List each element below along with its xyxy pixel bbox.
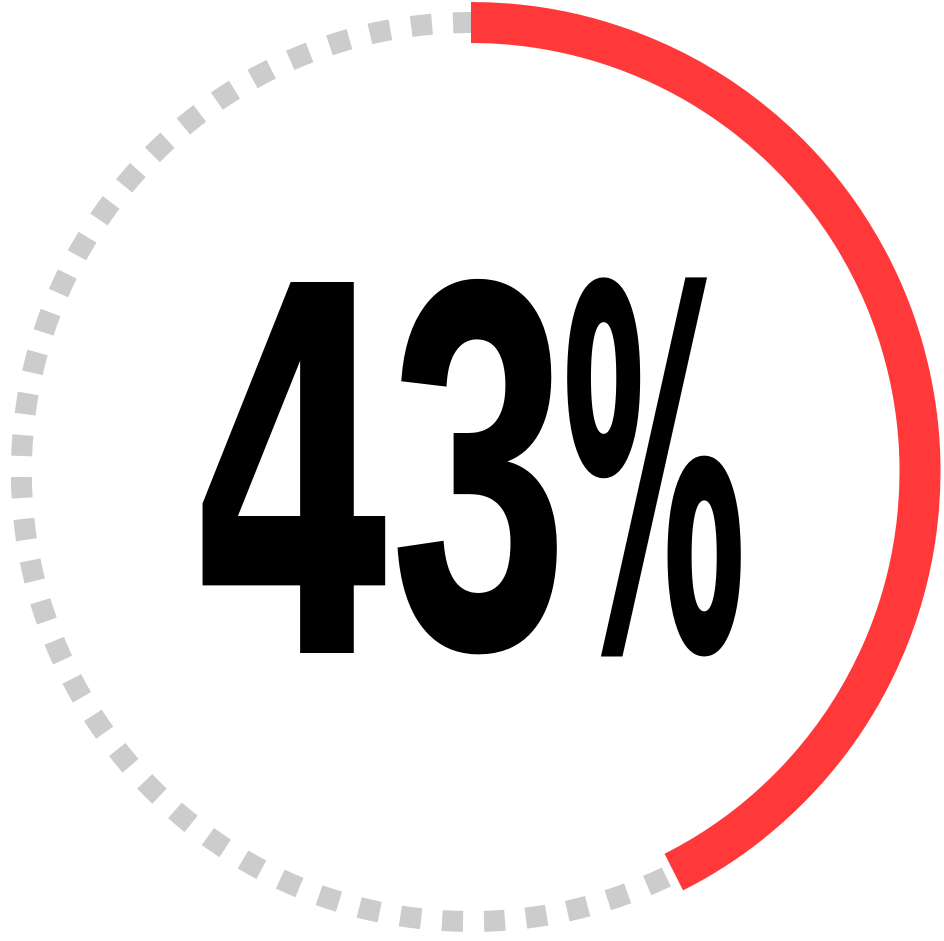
progress arc: red 43 percent — [471, 22, 920, 872]
value label: 43%: 4 — [189, 181, 399, 773]
value label: 43%: % — [562, 189, 746, 766]
value label: 43% — [189, 172, 746, 773]
value label: 43%: 3 — [391, 172, 567, 758]
